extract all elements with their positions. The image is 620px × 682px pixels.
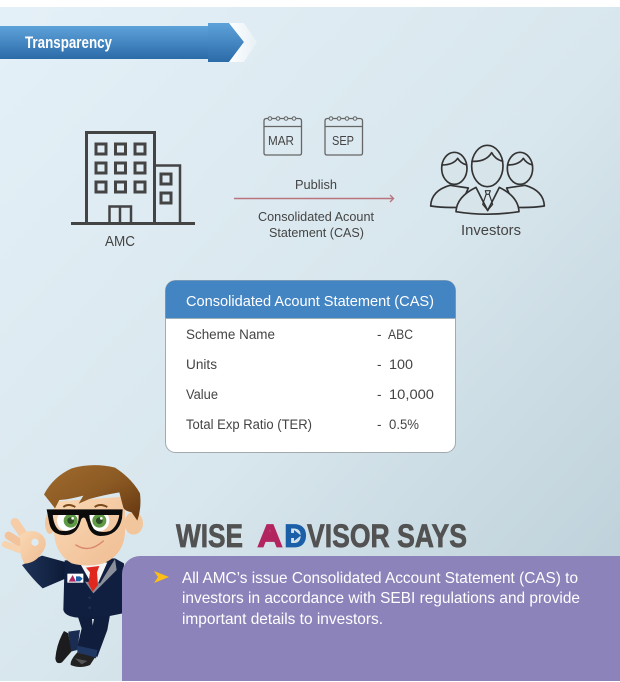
heading: Wise Advisor Says xyxy=(176,518,467,554)
icon: AMC building xyxy=(71,132,195,224)
table rows: 0.5% xyxy=(389,417,419,432)
arrow: publish direction xyxy=(234,195,394,202)
table rows: Scheme Name xyxy=(186,327,275,342)
label: Publish: Publish xyxy=(295,178,337,192)
mascot finger ring xyxy=(31,539,39,546)
heading: Wise Advisor Says: A xyxy=(257,518,283,554)
table rows: - xyxy=(377,357,382,372)
mascot jacket xyxy=(63,558,124,618)
label: Consolidated Acount Statement (CAS) xyxy=(258,210,375,240)
label: Consolidated Acount Statement (CAS): Consolidated Acount xyxy=(258,210,375,224)
table rows: ABC xyxy=(388,327,413,342)
label: Investors: Investors xyxy=(461,222,521,239)
mascot ear right xyxy=(124,512,143,535)
icon: calendar MAR: MAR xyxy=(268,133,294,148)
label: AMC: AMC xyxy=(105,233,135,250)
mascot glasses xyxy=(47,509,123,536)
table header xyxy=(166,280,456,318)
icon: yellow bullet arrow xyxy=(154,571,169,583)
table rows: 100 xyxy=(389,357,413,372)
mascot badge xyxy=(67,574,83,583)
mascot hand xyxy=(5,522,46,564)
label: Consolidated Acount Statement (CAS): Statement (CAS) xyxy=(269,226,364,240)
table rows: Value xyxy=(186,387,218,402)
mascot legs and shoes xyxy=(55,615,110,667)
character: wise advisor mascot xyxy=(5,465,143,667)
table rows: 10,000 xyxy=(389,387,434,402)
heading: Wise Advisor Says: D xyxy=(284,518,307,554)
table rows: - xyxy=(377,327,382,342)
icon: investors group xyxy=(431,145,544,214)
mascot smile xyxy=(76,541,103,549)
mascot right eye xyxy=(89,515,120,532)
heading: Wise Advisor Says: VISOR SAYS xyxy=(307,518,467,554)
table rows xyxy=(186,327,434,432)
mascot eyebrows xyxy=(63,505,107,507)
mascot hair xyxy=(44,465,140,521)
mascot left eye xyxy=(52,515,79,531)
mascot shirt, lapels and tie xyxy=(80,559,117,609)
heading: Wise Advisor Says: WISE xyxy=(176,518,243,554)
icon: calendar SEP: SEP xyxy=(332,133,354,148)
advice text: important details to investors. xyxy=(182,611,383,628)
table rows: - xyxy=(377,417,382,432)
mascot face xyxy=(53,497,125,565)
advice text: All AMC’s issue Consolidated Account Statement (CAS) to xyxy=(182,570,578,587)
icon: calendar SEP xyxy=(325,117,362,155)
banner: Transparency: Transparency xyxy=(25,34,113,52)
panel: CAS table xyxy=(166,280,456,452)
panel: advice xyxy=(122,556,620,681)
advice text: investors in accordance with SEBI regulations and provide xyxy=(182,590,580,607)
table header: Consolidated Acount Statement (CAS) xyxy=(186,293,434,310)
advice text xyxy=(182,570,580,628)
mascot ear left xyxy=(45,513,55,534)
table rows: Total Exp Ratio (TER) xyxy=(186,417,312,432)
banner: Transparency xyxy=(0,23,257,62)
mascot arm xyxy=(22,556,67,588)
icon: calendar MAR xyxy=(264,117,302,155)
table rows: - xyxy=(377,387,382,402)
table rows: Units xyxy=(186,357,217,372)
